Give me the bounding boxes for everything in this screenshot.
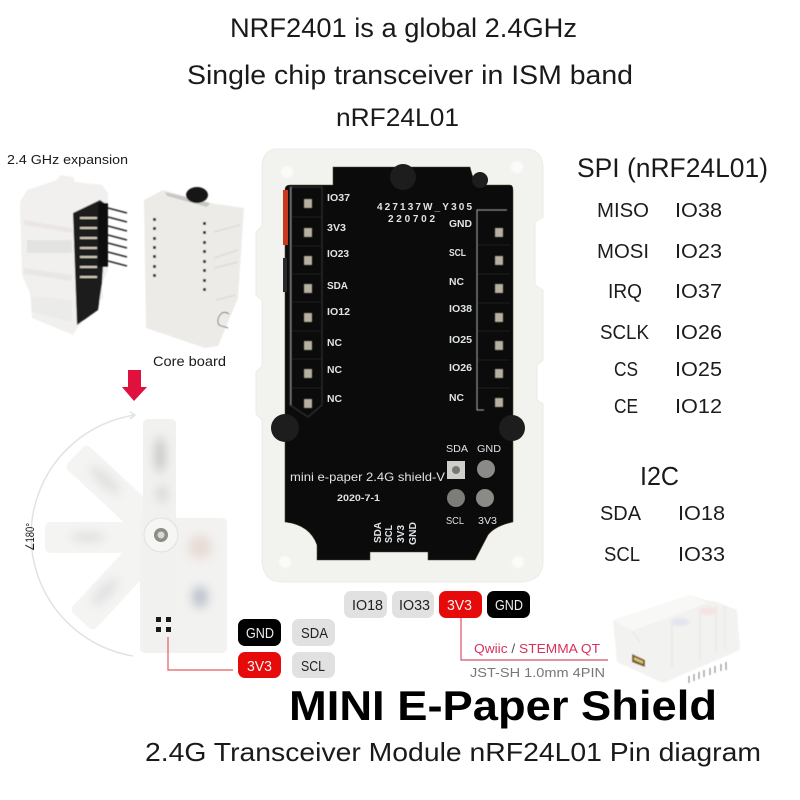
row: IRQ: IO37 — [675, 281, 722, 303]
row: MOSI: MOSI — [597, 241, 649, 263]
panel: SPI pin table — [577, 153, 768, 418]
red edge accent — [283, 190, 288, 292]
pin tags: side connector: 3V3 — [247, 658, 272, 675]
left pin labels: IO23 — [327, 249, 349, 260]
row: IRQ — [608, 281, 722, 303]
right pin labels — [449, 219, 472, 404]
icon: core board — [144, 187, 244, 348]
label: core board: Core board — [153, 353, 226, 369]
row: MOSI — [597, 241, 722, 263]
board name: mini e-paper 2.4G shield-V — [290, 470, 445, 484]
label: 2.4 GHz expansion: 2.4 GHz expansion — [7, 152, 128, 167]
right pin labels: GND — [449, 219, 472, 230]
right pin labels: NC — [449, 393, 464, 404]
I2C holes — [156, 617, 171, 632]
pin tags: side connector: SDA — [301, 625, 328, 642]
title: nRF24L01 — [336, 104, 459, 132]
left pin strip — [290, 187, 322, 417]
right pin labels: SCL — [449, 248, 466, 259]
ghost positions of the lid — [45, 444, 173, 631]
row: CS: CS — [614, 359, 638, 381]
panel: main PCB in white frame — [256, 149, 543, 582]
pin tags: side connector: GND — [246, 625, 274, 642]
panel: I2C pin table — [600, 461, 725, 566]
right pin labels: IO26 — [449, 363, 472, 374]
right pin labels: NC — [449, 277, 464, 288]
left pin labels: IO37 — [327, 193, 350, 204]
row: SDA: IO18 — [678, 503, 725, 525]
right pin strip — [477, 210, 510, 410]
pin tags: top connector: GND — [495, 597, 523, 614]
row: MOSI: IO23 — [675, 241, 722, 263]
left pin labels: NC — [327, 394, 342, 405]
pin tags: top connector — [344, 591, 530, 618]
row: CE — [614, 396, 722, 418]
pin tags: side connector — [238, 619, 335, 678]
arrow: red down arrow — [122, 370, 147, 401]
board date: 2020-7-1 — [337, 493, 380, 503]
connector vertical labels — [373, 522, 419, 545]
left pin labels: 3V3 — [327, 223, 346, 234]
pin tags: top connector: IO18 — [352, 597, 383, 614]
row: SCL: SCL — [604, 544, 640, 566]
heading: I2C: I2C — [640, 461, 679, 491]
row: MISO: IO38 — [675, 200, 722, 222]
upright lid — [143, 419, 176, 652]
connector vertical labels: SDA — [373, 522, 384, 543]
row: CE: CE — [614, 396, 638, 418]
row: SCLK — [600, 322, 722, 344]
row: SCLK: SCLK — [600, 322, 650, 344]
pin tags: top connector: 3V3 — [447, 597, 472, 614]
row: SCLK: IO26 — [675, 322, 722, 344]
translucent shading — [70, 437, 212, 609]
row: SCL — [604, 544, 725, 566]
row: MISO: MISO — [597, 200, 649, 222]
pin tags: side connector: SCL — [301, 658, 325, 675]
pin tags: top connector: IO33 — [399, 597, 430, 614]
connector vertical labels: 3V3 — [396, 525, 407, 543]
board code: 427137W_Y305 — [377, 202, 472, 213]
right pin labels: IO25 — [449, 335, 472, 346]
row: SDA — [600, 503, 725, 525]
row: CE: IO12 — [675, 396, 722, 418]
I2C pads: GND — [477, 444, 501, 455]
heading: MINI E-Paper Shield: MINI E-Paper Shield — [289, 682, 717, 729]
board code: 220702 — [388, 214, 435, 225]
row: MISO — [597, 200, 722, 222]
I2C pads: 3V3 — [478, 516, 497, 527]
label: 180 degree angle: ∠180° — [23, 523, 37, 551]
subheading: pin diagram: 2.4G Transceiver Module nRF24L01 Pin diagram — [145, 737, 761, 767]
label: Qwiic / STEMMA QT: Qwiic / STEMMA QT — [474, 641, 600, 656]
I2C pads: SDA — [446, 444, 468, 455]
left pin labels: IO12 — [327, 307, 350, 318]
left pin labels — [327, 193, 350, 405]
title: Single chip transceiver in ISM band — [187, 60, 633, 90]
screws — [271, 164, 525, 442]
row: CS: IO25 — [675, 359, 722, 381]
I2C pads — [446, 444, 501, 527]
connector line: side 3V3 — [168, 637, 233, 670]
board code — [377, 202, 472, 225]
right pin labels: IO38 — [449, 304, 472, 315]
label: JST-SH connector: JST-SH 1.0mm 4PIN — [470, 665, 605, 680]
hinge — [144, 518, 178, 552]
connector vertical labels: SCL — [384, 525, 395, 543]
I2C pads: SCL — [446, 516, 464, 527]
arrow: 180 degree rotation arc — [31, 412, 135, 656]
row: CS — [614, 359, 722, 381]
left pin labels: NC — [327, 338, 342, 349]
icon: rotating shield module — [45, 419, 227, 653]
heading: SPI: SPI (nRF24L01) — [577, 153, 768, 183]
icon: assembled module — [613, 595, 740, 683]
icon: 2.4 GHz expansion module — [20, 175, 127, 335]
left pin labels: NC — [327, 365, 342, 376]
connector line: Qwiic — [461, 618, 608, 660]
module body — [140, 518, 227, 653]
row: SDA: SDA — [600, 503, 642, 525]
row: IRQ: IRQ — [608, 281, 642, 303]
left pin labels: SDA — [327, 281, 348, 292]
connector vertical labels: GND — [408, 522, 419, 545]
row: SCL: IO33 — [678, 544, 725, 566]
title — [187, 13, 633, 132]
title: NRF2401 is a global 2.4GHz — [230, 13, 577, 43]
